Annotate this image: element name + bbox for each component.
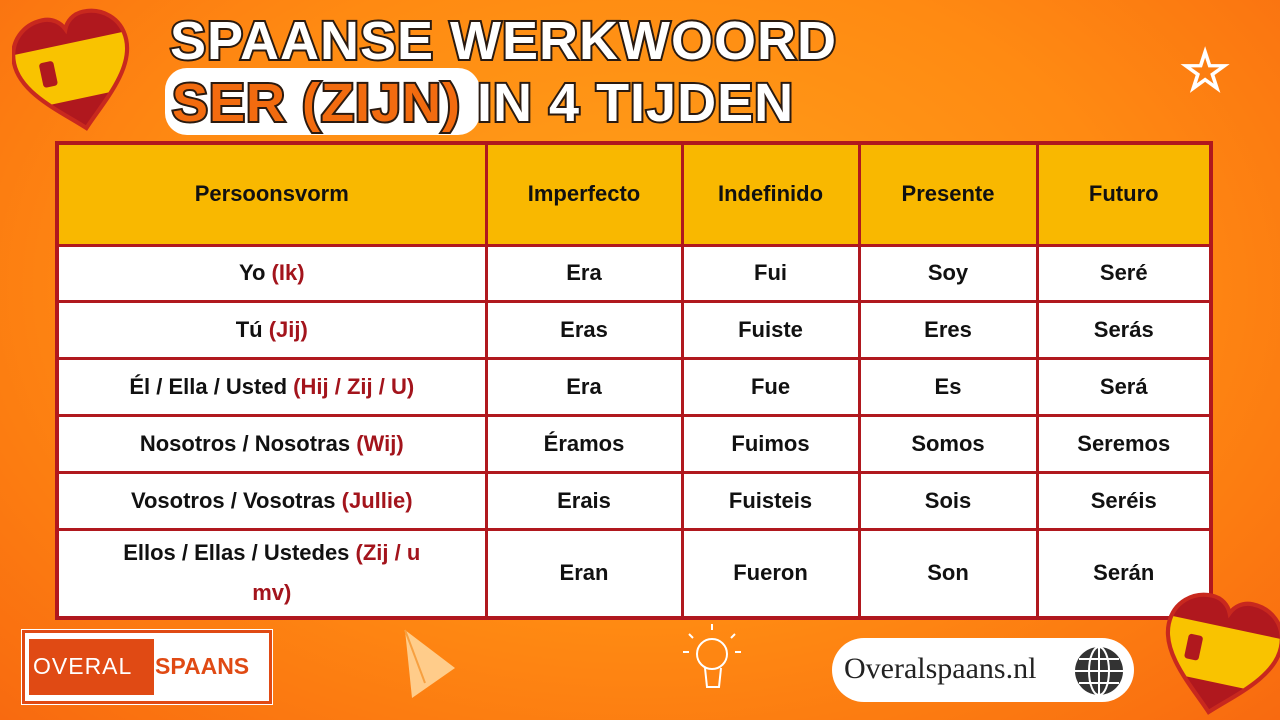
conjugation table: Serás — [1094, 316, 1154, 342]
conjugation table: Presente — [902, 181, 994, 206]
conjugation table: Soy — [928, 260, 968, 285]
conjugation table — [55, 141, 1213, 620]
conjugation table: Indefinido — [718, 181, 823, 206]
conjugation table: Serán — [1093, 560, 1154, 585]
conjugation table: Fuimos — [731, 430, 810, 456]
logo: Overal Spaans: SPAANS — [155, 653, 249, 679]
conjugation table: Vosotros / Vosotras (Jullie) — [131, 488, 413, 512]
logo: Overal Spaans: OVERAL — [33, 653, 132, 679]
conjugation table: Eras — [560, 316, 608, 342]
conjugation table: Ellos / Ellas / Ustedes (Zij / u — [123, 540, 420, 565]
website pill — [832, 638, 1134, 702]
conjugation table: Fuisteis — [729, 488, 812, 512]
conjugation table: Yo (Ik) — [239, 260, 305, 285]
title highlight pill — [165, 68, 480, 135]
conjugation table: Éramos — [544, 430, 624, 456]
conjugation table: Seréis — [1091, 488, 1157, 512]
conjugation table: Erais — [557, 488, 611, 512]
conjugation table: Sois — [925, 488, 971, 512]
conjugation table: Era — [566, 374, 602, 398]
conjugation table: Fue — [751, 374, 790, 398]
conjugation table: Seremos — [1077, 430, 1170, 456]
conjugation table: Persoonsvorm — [195, 181, 349, 206]
conjugation table: Somos — [911, 430, 985, 456]
conjugation table: mv) — [252, 580, 291, 605]
conjugation table: Eran — [560, 560, 608, 585]
conjugation table: Fui — [754, 260, 787, 285]
conjugation table: Futuro — [1089, 181, 1159, 206]
website pill: Overalspaans.nl — [844, 652, 1036, 685]
conjugation table: Era — [566, 260, 602, 285]
conjugation table: Son — [927, 560, 969, 585]
icon: globe — [1075, 647, 1123, 695]
conjugation table: Seré — [1100, 260, 1148, 285]
icon: light bulb — [683, 624, 741, 688]
title line 1: SPAANSE WERKWOORD — [170, 11, 837, 71]
heart flag right — [1166, 592, 1280, 715]
conjugation table: Tú (Jij) — [236, 316, 308, 342]
icon: paper plane — [404, 630, 455, 698]
conjugation table: Fueron — [733, 560, 808, 585]
conjugation table: Imperfecto — [528, 181, 640, 206]
heart flag left — [12, 8, 130, 131]
logo: Overal Spaans — [22, 630, 272, 704]
conjugation table: Él / Ella / Usted (Hij / Zij / U) — [129, 374, 414, 398]
conjugation table: Será — [1100, 374, 1148, 398]
conjugation table: Nosotros / Nosotras (Wij) — [140, 430, 404, 456]
conjugation table: Es — [935, 374, 961, 398]
title line 2: SER (ZIJN) IN 4 TIJDEN — [172, 73, 794, 133]
conjugation table: Fuiste — [738, 316, 803, 342]
conjugation table: Eres — [924, 316, 972, 342]
